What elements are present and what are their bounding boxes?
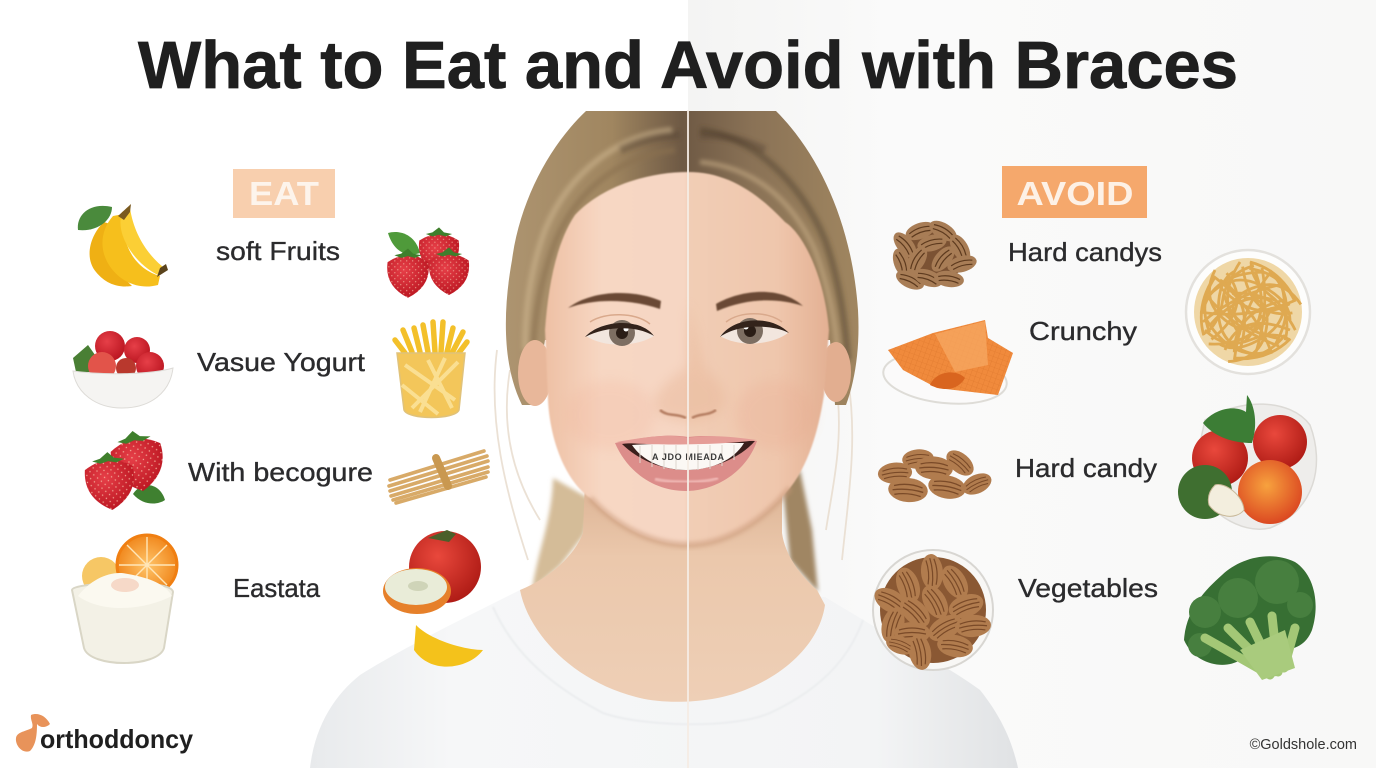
heading: EAT: EAT [249,175,319,212]
heading: EAT [233,169,335,218]
portrait: shirt [310,590,1018,768]
portrait: mouth with braces: A JDO MIEADA [652,452,724,462]
heading: AVOID [1002,166,1147,218]
label: Eastata: Eastata [233,573,321,603]
icon: broccoli [1184,556,1316,680]
icon: breadsticks bundle [389,451,488,503]
portrait: hair [506,111,858,405]
logo: orthoddoncy [16,714,194,754]
label: Hard candy: Hard candy [1015,453,1157,483]
icon: bowl of pecans [870,550,993,672]
label: Crunchy: Crunchy [1029,316,1137,346]
icon: bowl of noodles [1181,247,1315,379]
icon: pile of nuts [889,217,979,294]
portrait: eyebrows [568,292,803,311]
credit: ©Goldshole.com [1250,737,1357,753]
title: What to Eat and Avoid with Braces [138,28,1238,103]
portrait: smiling woman split down the centre [310,111,1018,768]
portrait: eyes [585,314,789,346]
icon: tomato, apple, lemon [383,530,483,667]
icon: strawberries on leaf [83,427,168,512]
icon: logo mark [16,714,50,752]
portrait: ponytail hair behind neck [495,350,852,592]
portrait: mouth with braces [615,436,757,491]
label: Vegetables: Vegetables [1018,573,1158,603]
label: Vasue Yogurt: Vasue Yogurt [197,347,366,377]
AVOID column [870,166,1317,680]
heading: AVOID: AVOID [1016,175,1134,212]
icon: bananas [78,204,168,287]
portrait: centre split line [687,110,689,768]
EAT column [72,169,488,667]
icon: strawberries top right [387,227,469,298]
icon: crunchy orange chips on plate [881,320,1013,409]
label: soft Fruits: soft Fruits [216,236,340,266]
label: With becogure: With becogure [188,457,373,487]
portrait: neck [520,480,825,702]
portrait: ears [518,340,851,406]
icon: fruit bowl [1178,395,1317,529]
icon: pecans [877,445,995,504]
portrait: face [545,172,829,545]
label: Hard candys: Hard candys [1008,237,1162,267]
icon: pasta in glass [395,322,467,418]
logo: orthoddoncy: orthoddoncy [40,724,194,754]
portrait: nose [655,300,725,422]
icon: yogurt with orange [72,535,177,663]
icon: bowl of strawberries [73,331,173,408]
